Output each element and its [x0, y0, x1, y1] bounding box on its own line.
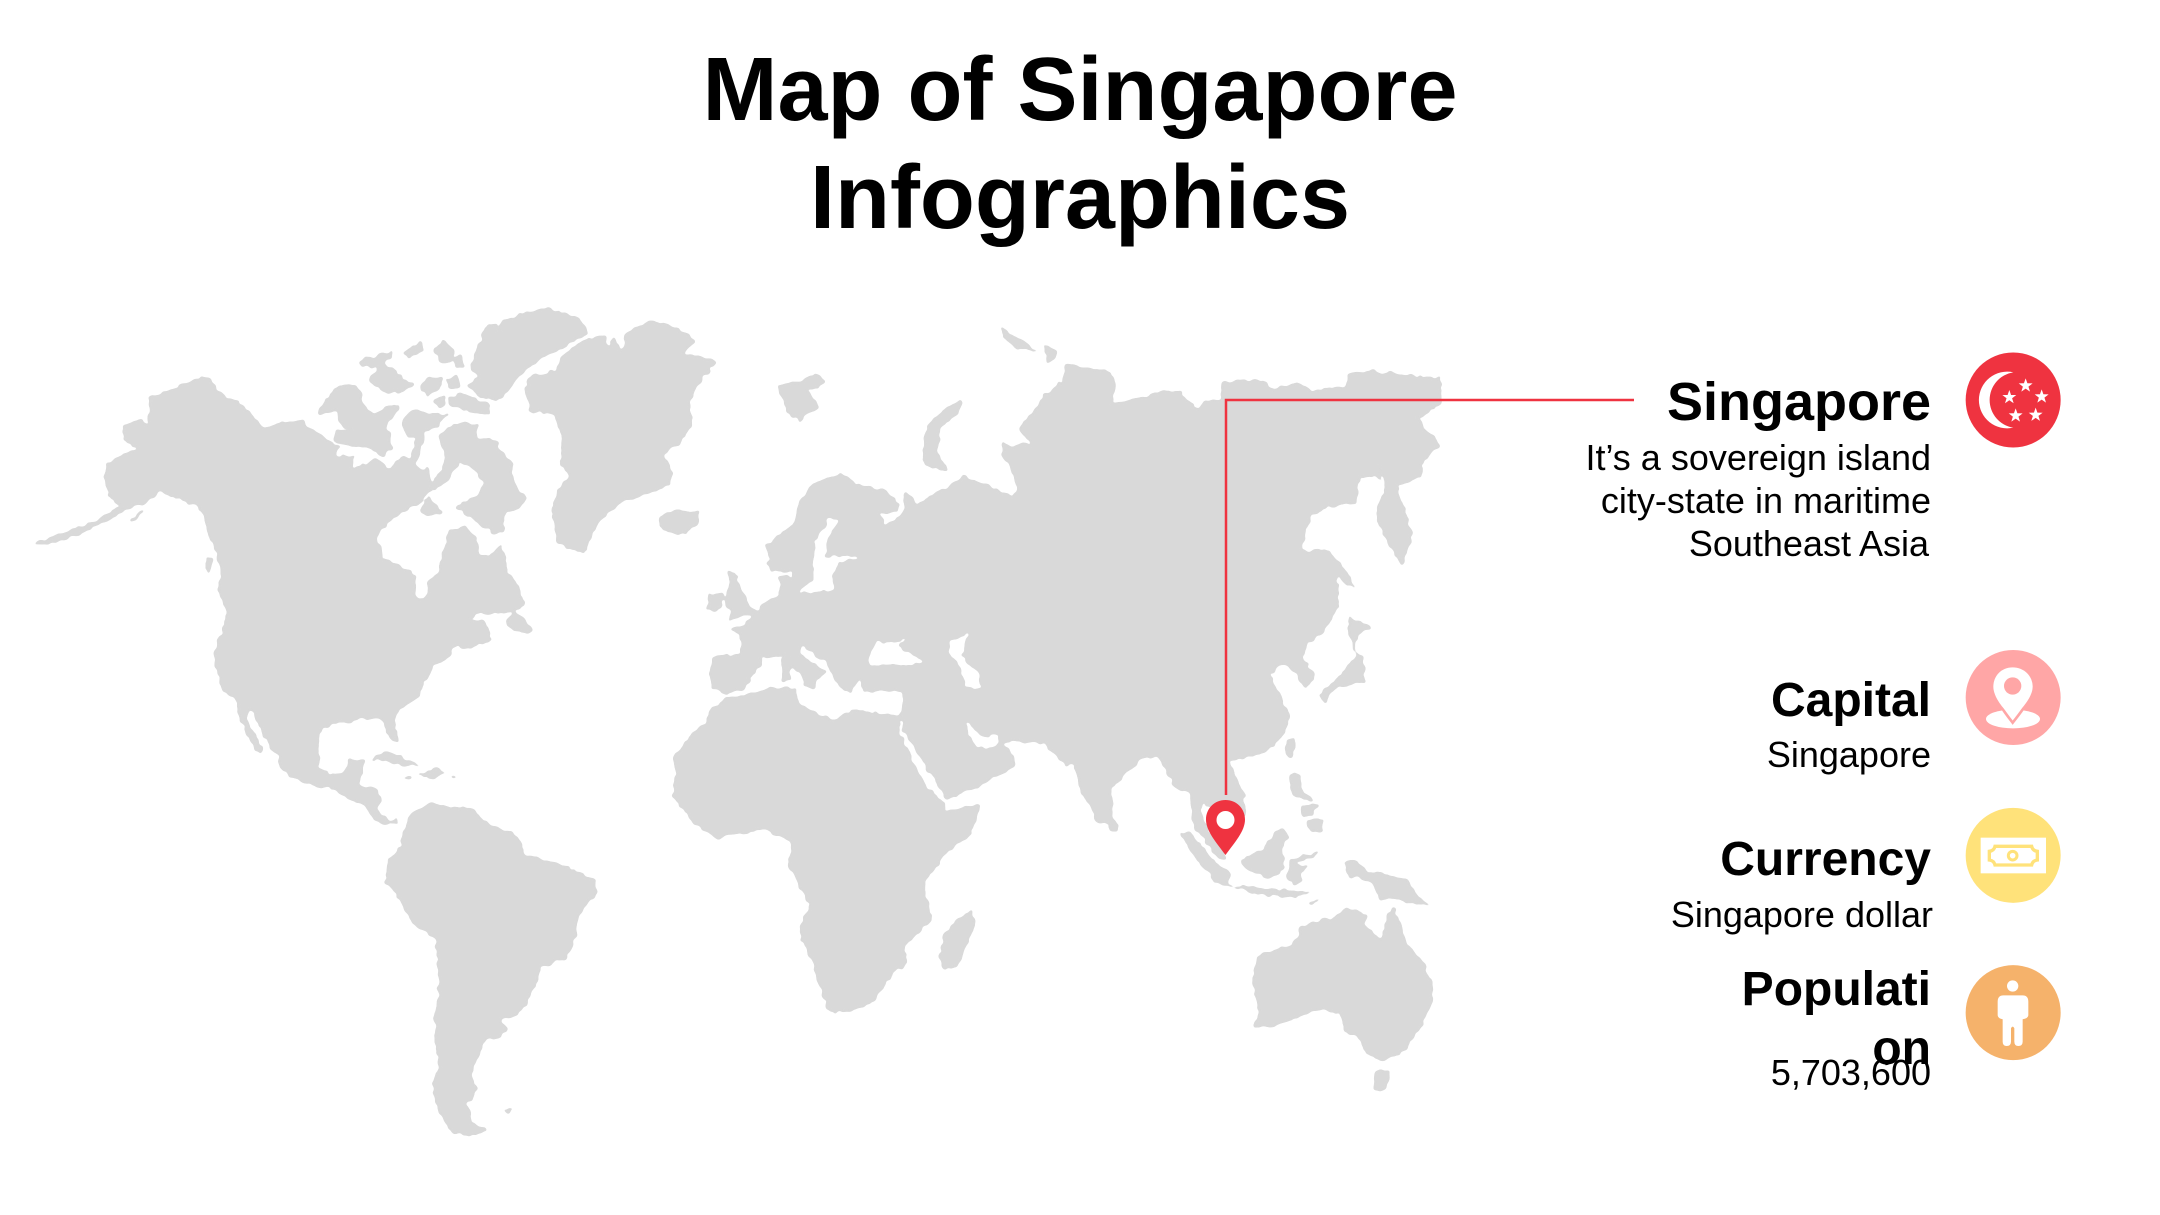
- icon: person: [1966, 965, 2061, 1060]
- panel: Currency: Currency: [1720, 833, 1931, 886]
- map pin: [1206, 800, 1245, 855]
- panel: Population: 5,703,600: [1771, 1052, 1931, 1093]
- description: [1585, 437, 1931, 564]
- map: Eurasia, Africa and Oceania: [673, 327, 1442, 1091]
- title: [702, 40, 1458, 248]
- connector line: [1226, 400, 1634, 795]
- panel: Capital: Capital: [1771, 674, 1931, 727]
- description: It’s a sovereign island: [1585, 437, 1931, 478]
- description: city-state in maritime: [1601, 480, 1931, 521]
- icon: Singapore flag: [1966, 352, 2061, 447]
- icon: location pin: [1966, 650, 2061, 745]
- map: Americas and Arctic: [31, 308, 717, 1138]
- icon: banknote: [1966, 808, 2061, 903]
- panel: Currency: Singapore dollar: [1671, 894, 1933, 935]
- heading: Singapore: Singapore: [1667, 372, 1931, 432]
- panel: Singapore: [1585, 372, 1931, 564]
- map: inland seas: [798, 518, 999, 749]
- panel: Population: [1742, 963, 1931, 1093]
- world map: [31, 308, 1442, 1138]
- panel: Currency: [1671, 833, 1933, 935]
- description: Southeast Asia: [1689, 523, 1930, 564]
- panel: Capital: Singapore: [1767, 734, 1931, 775]
- title: Infographics: [810, 148, 1350, 248]
- panel: Population: on: [1872, 1022, 1931, 1075]
- title: Map of Singapore: [702, 40, 1458, 140]
- panel: Capital: [1767, 674, 1931, 775]
- panel: Population: Populati: [1742, 963, 1931, 1016]
- map: land: [31, 308, 1442, 1138]
